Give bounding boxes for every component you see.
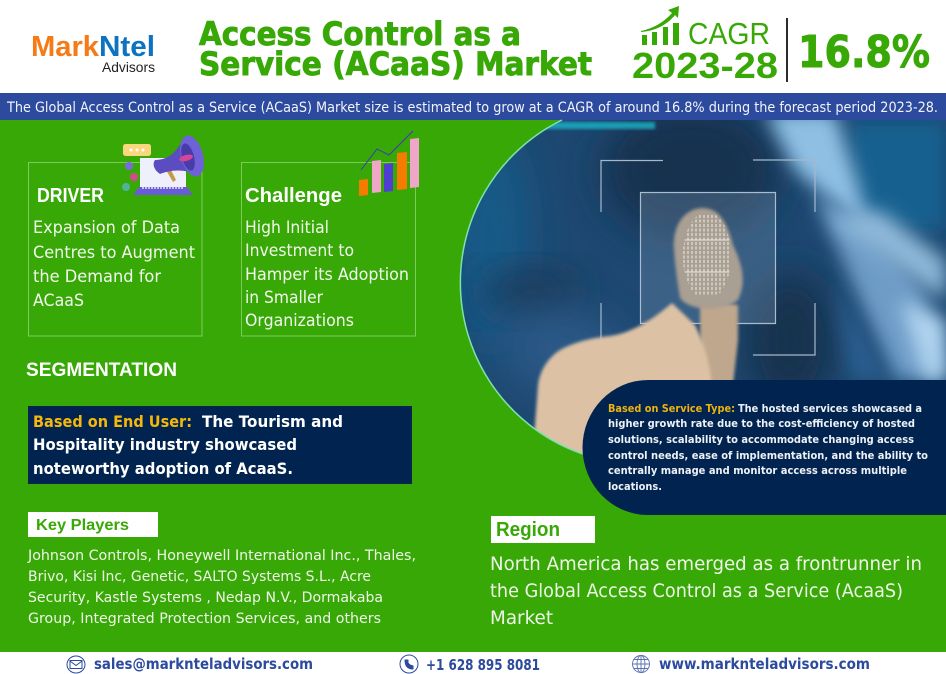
icon: phone [400, 655, 418, 673]
panel: end user segmentation: noteworthy adoption of AcaaS. [33, 459, 293, 478]
footer email: sales@marknteladvisors.com [94, 655, 313, 673]
photo circle outline [460, 120, 583, 454]
title [199, 15, 592, 83]
CAGR period: 2023-28 [632, 45, 778, 86]
icon: growth bar chart [359, 131, 419, 196]
icon: megaphone and laptop [122, 133, 208, 195]
header background [0, 0, 946, 93]
panel: service type segmentation: The hosted services showcased a [738, 402, 922, 415]
heading: segmentation: SEGMENTATION [26, 360, 177, 381]
panel: driver: DRIVER [37, 185, 104, 207]
panel: end user segmentation [28, 406, 412, 484]
title: Service (ACaaS) Market [199, 45, 592, 83]
panel: driver: Centres to Augment [33, 243, 195, 263]
region text: Market [490, 607, 553, 629]
logo: MarkNtel Advisors: Advisors [102, 59, 155, 75]
logo: MarkNtel Advisors [31, 31, 155, 75]
panel: service type segmentation: solutions, scalability to accommodate changing access [608, 433, 914, 446]
key players label: Key Players [36, 517, 129, 534]
region label: Region [496, 519, 560, 541]
region text: the Global Access Control as a Service (AcaaS) [490, 580, 903, 602]
logo: MarkNtel Advisors: Ntel [99, 31, 155, 63]
key players list: Security, Kastle Systems , Nedap N.V., Dormakaba [28, 590, 383, 606]
panel: service type segmentation: centrally manage and monitor access across multiple [608, 464, 907, 477]
panel: driver [28, 162, 202, 336]
divider [786, 18, 788, 82]
CAGR label: CAGR [688, 16, 770, 51]
footer background [0, 652, 946, 674]
main green background [0, 120, 946, 652]
region text [490, 553, 922, 629]
key players list: Group, Integrated Protection Services, and others [28, 611, 381, 627]
region label [491, 516, 595, 543]
key players list: Johnson Controls, Honeywell International Inc., Thales, [27, 548, 416, 564]
panel: end user segmentation: The Tourism and [202, 412, 343, 431]
panel: challenge: in Smaller [245, 288, 323, 308]
panel: driver: Expansion of Data [33, 218, 180, 238]
key players list [27, 548, 416, 627]
panel: end user segmentation: Based on End User: [33, 412, 192, 431]
panel: challenge: High Initial [245, 218, 329, 238]
title: Access Control as a [199, 15, 521, 53]
panel: end user segmentation: Hospitality industry showcased [33, 435, 297, 454]
panel: challenge: Organizations [245, 311, 354, 331]
panel: service type segmentation: higher growth rate due to the cost-efficiency of hosted [608, 417, 915, 430]
icon: globe [632, 656, 650, 672]
key players label [28, 512, 158, 537]
key players list: Brivo, Kisi Inc, Genetic, SALTO Systems S.L., Acre [28, 569, 371, 585]
footer website: www.marknteladvisors.com [659, 655, 870, 673]
region text: North America has emerged as a frontrunner in [490, 553, 922, 575]
photo: finger touching scanner [461, 120, 946, 454]
panel: driver: ACaaS [33, 291, 84, 311]
footer phone: +1 628 895 8081 [426, 656, 540, 674]
icon: email [67, 656, 85, 673]
panel: challenge: Investment to [245, 241, 354, 261]
icon: CAGR growth bars and arrow [641, 6, 679, 45]
summary bar [0, 93, 946, 120]
panel: service type segmentation: locations. [608, 480, 662, 493]
panel: driver: the Demand for [33, 267, 161, 287]
panel: challenge [242, 162, 416, 336]
logo: MarkNtel Advisors: Mark [31, 31, 100, 63]
panel: service type segmentation [583, 380, 946, 515]
panel: challenge: Hamper its Adoption [245, 265, 409, 285]
panel: challenge: Challenge [245, 185, 342, 207]
panel: service type segmentation: Based on Service Type: [608, 402, 735, 415]
